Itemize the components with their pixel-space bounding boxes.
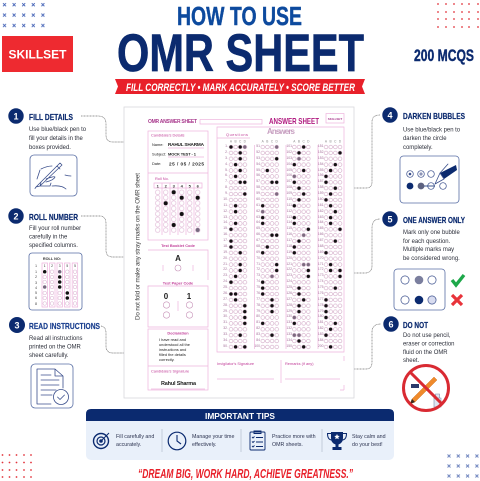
icon: roll number grid: 8: [35, 302, 37, 306]
title: OMR SHEET: [117, 24, 364, 83]
panel: step 4 darken bubbles: completely.: [403, 145, 433, 151]
panel: step 6 do not: [383, 316, 454, 410]
icon: roll number grid: 1: [35, 264, 37, 268]
candidate details: 25 / 05 / 2025: [169, 162, 204, 166]
answer grid: A: [262, 140, 265, 144]
sheet header: [148, 114, 344, 136]
connector: one answer only: [350, 219, 380, 274]
test booklet code: A: [175, 254, 181, 263]
test paper code: 0: [164, 292, 169, 301]
panel: step 2 roll number: carefully in the: [29, 234, 68, 240]
connector: read instructions: [101, 326, 144, 354]
answer grid: D: [244, 140, 247, 144]
answer grid: D: [339, 140, 342, 144]
icon: trophy: [328, 432, 346, 450]
logo: SKILLSET: [2, 36, 73, 72]
panel: step 6 do not: sheet.: [403, 358, 420, 364]
answer grid: B: [266, 140, 268, 144]
icon: roll number grid: 1: [44, 264, 46, 268]
panel: step 2 roll number: [8, 208, 82, 310]
panel: step 6 do not: fluid on the OMR: [403, 350, 448, 356]
answer grid: D: [307, 140, 310, 144]
tip: stay calm: Stay calm and: [352, 434, 386, 440]
icon: roll number grid: 5: [66, 264, 68, 268]
decorative crosses bottom right: [444, 451, 480, 481]
icon: clock: [168, 432, 186, 450]
answer grid: [216, 127, 344, 352]
tip: fill carefully: Fill carefully and: [116, 434, 154, 440]
panel: step 4 darken bubbles: 4: [387, 110, 393, 120]
panel: step 6 do not: eraser or correction: [403, 342, 454, 348]
answer grid: 151 152 153 154 155 156 157 158 159 160 161 162 163 164 165 166 167 168 169 170 171 172 173 174 175 176 177 178 179 180 181 182 183 184 200: [318, 144, 324, 348]
icon: roll number grid: 4: [35, 286, 37, 290]
tip: stay calm: do your best!: [352, 442, 383, 448]
panel: step 6 do not: 6: [388, 319, 394, 329]
connector: darken bubbles: [350, 115, 380, 190]
icon: roll number grid: ROLL NO:: [43, 257, 61, 261]
icon: target: [94, 433, 109, 448]
icon: roll number grid: 6: [35, 296, 37, 300]
tip: manage time: [192, 434, 234, 448]
answer grid: B: [298, 140, 300, 144]
icon: roll number grid: [29, 253, 82, 310]
icon: roll number grid: 1: [35, 270, 37, 274]
ribbon subtitle: [115, 79, 365, 94]
answer grid: C: [239, 140, 242, 144]
declaration: instructions and: [159, 347, 186, 352]
candidate details: [148, 131, 208, 240]
answer grid: D: [276, 140, 279, 144]
panel: step 1 fill details: FILL DETAILS: [29, 112, 73, 122]
panel: step 3 read instructions: 3: [14, 320, 20, 330]
rotated instruction: Do not fold or make any stray marks on the OMR sheet: [134, 173, 142, 320]
answer grid: Questions: [226, 132, 248, 137]
connector: do not: [350, 324, 381, 370]
panel: step 5 one answer only: for each question.: [403, 239, 451, 245]
panel: step 1 fill details: Use blue/black pen to: [29, 127, 87, 133]
declaration: filled the details: [159, 352, 186, 357]
declaration: [148, 329, 208, 390]
candidate details: Candidate's Details: [151, 132, 184, 138]
icon: roll number grid: 3: [35, 281, 37, 285]
panel: OMR answer sheet: [124, 107, 354, 398]
tip: manage time: effectively.: [192, 442, 217, 448]
panel: step 1 fill details: 1: [13, 111, 19, 121]
answer grid: C: [334, 140, 337, 144]
icon: roll number grid: 5: [35, 291, 37, 295]
answer grid: A: [325, 140, 328, 144]
panel: step 3 read instructions: printed on the OMR: [29, 344, 82, 350]
quote: “DREAM BIG, WORK HARD, ACHIEVE GREATNESS.”: [138, 467, 354, 481]
signature and remarks: [217, 356, 344, 390]
candidate details: Subject:: [152, 152, 166, 156]
connector: fill details: [81, 116, 144, 144]
panel: step 6 do not: DO NOT: [403, 320, 429, 330]
roll number grid on sheet: 1: [157, 183, 160, 188]
roll number grid on sheet: 2: [165, 183, 168, 188]
title: HOW TO USE: [177, 1, 302, 31]
icon: roll number grid: 5: [74, 264, 76, 268]
roll number grid on sheet: 5: [189, 183, 192, 188]
decorative crosses top left: [0, 0, 48, 30]
panel: step 3 read instructions: Read all instructions: [29, 336, 82, 342]
tip: fill carefully: accurately.: [116, 442, 141, 448]
panel: step 4 darken bubbles: Use blue/black pen to: [403, 128, 461, 134]
icon: right and wrong bubbles: [394, 269, 464, 310]
icon: prohibited pencil and fluid: [404, 366, 448, 410]
declaration: correctly.: [159, 357, 174, 362]
tip: manage time: Manage your time: [192, 434, 234, 440]
candidate details: Name:: [152, 142, 163, 147]
answer grid: A: [230, 140, 233, 144]
panel: step 4 darken bubbles: [382, 107, 465, 203]
icon: roll number grid: 2: [35, 275, 37, 279]
test paper code: [148, 280, 208, 327]
declaration: Declaration: [167, 330, 189, 336]
panel: step 1 fill details: boxes provided.: [29, 145, 71, 151]
icon: document with check: [31, 364, 73, 408]
panel: step 5 one answer only: Multiple marks may: [403, 247, 454, 253]
sheet header: ANSWER SHEET: [269, 116, 320, 126]
test booklet code: Test Booklet Code: [161, 243, 196, 248]
declaration: understood all the: [159, 342, 190, 347]
decorative dots top right: [437, 3, 479, 28]
answer grid: C: [303, 140, 306, 144]
icon: pen darkening bubbles: [400, 156, 459, 203]
answer grid: 1. 2. 3. 4. 5. 6. 7. 8. 9. 10. 11. 12. 13. 14. 15. 16. 17. 18. 19. 20. 21. 22. 23. 24. 25. 26. 27. 28. 29. 30. 31. 32. 33. 34. 50.: [223, 144, 228, 348]
tip: fill carefully: [116, 434, 154, 448]
panel: step 1 fill details: [8, 108, 87, 196]
test booklet code: [148, 243, 208, 280]
panel: step 6 do not: Do not use pencil,: [403, 333, 451, 339]
icon: roll number grid: 2: [51, 264, 53, 268]
ribbon subtitle: FILL CORRECTLY • MARK ACCURATELY • SCORE BETTER: [126, 82, 355, 94]
declaration: Rahul Sharma: [161, 381, 197, 387]
declaration: Candidate's Signature: [151, 368, 189, 374]
answer grid: 51 52 53 54 55 56 57 58 59 60 61 62 63 64 65 66 67 68 69 70 71 72 73 74 75 76 77 78 79 80 81 82 83 84 100: [254, 144, 260, 348]
panel: step 2 roll number: ROLL NUMBER: [29, 212, 78, 222]
panel: important tips: [86, 409, 394, 460]
icon: roll number grid: 3: [59, 264, 61, 268]
panel: step 5 one answer only: [382, 211, 465, 310]
answer grid: B: [330, 140, 332, 144]
panel: step 2 roll number: 2: [13, 211, 19, 221]
tip: stay calm: [352, 434, 386, 448]
panel: step 2 roll number: Fill your roll number: [29, 226, 81, 232]
decorative dots bottom left: [2, 454, 32, 478]
panel: step 2 roll number: specified columns.: [29, 243, 78, 249]
declaration: I have read and: [159, 337, 186, 342]
tip: practice: OMR sheets.: [272, 442, 303, 448]
tips header: [86, 409, 394, 421]
panel: step 5 one answer only: Mark only one bubble: [403, 230, 460, 236]
panel: step 3 read instructions: [9, 317, 100, 408]
panel: step 1 fill details: fill your details in the: [29, 136, 83, 142]
answer grid: C: [271, 140, 274, 144]
test paper code: Test Paper Code: [163, 280, 194, 286]
connector: roll number: [81, 216, 146, 258]
test paper code: 1: [187, 292, 192, 301]
candidate details: Date:: [152, 161, 161, 166]
sheet header: SKILLSET: [328, 117, 342, 121]
roll number grid on sheet: Roll No.: [155, 176, 169, 181]
panel: step 4 darken bubbles: darken the circle: [403, 136, 447, 142]
candidate details: RAHUL SHARMA: [168, 142, 205, 147]
panel: step 5 one answer only: 5: [387, 214, 393, 224]
title: [117, 1, 364, 83]
tip: practice: Practice more with: [272, 434, 316, 440]
answer grid: A: [293, 140, 296, 144]
candidate details: MOCK TEST - 1: [168, 152, 197, 156]
answer grid: B: [235, 140, 237, 144]
signature and remarks: Invigilator's Signature: [217, 361, 254, 366]
icon: hand writing with pen: [30, 155, 77, 196]
sheet header: Answers: [267, 127, 296, 136]
logo: SKILLSET: SKILLSET: [8, 48, 67, 62]
tips header: IMPORTANT TIPS: [205, 412, 275, 421]
roll number grid on sheet: 3: [173, 183, 176, 188]
roll number grid on sheet: 6: [197, 183, 200, 188]
sheet header: OMR ANSWER SHEET: [148, 119, 197, 125]
icon: checklist: [250, 431, 265, 450]
panel: step 3 read instructions: READ INSTRUCTIONS: [29, 321, 100, 331]
answer grid: 101 102 103 104 105 106 107 108 109 110 111 112 113 114 115 116 117 118 119 120 121 122 123 124 125 126 127 128 129 130 131 132 133 134 150: [286, 144, 292, 348]
panel: step 3 read instructions: sheet carefully.: [29, 353, 69, 359]
tip: practice: [272, 434, 316, 448]
roll number grid on sheet: [154, 176, 202, 235]
signature and remarks: Remarks (if any): [285, 361, 314, 366]
panel: step 5 one answer only: be considered wrong.: [403, 256, 460, 262]
roll number grid on sheet: 4: [181, 183, 184, 188]
